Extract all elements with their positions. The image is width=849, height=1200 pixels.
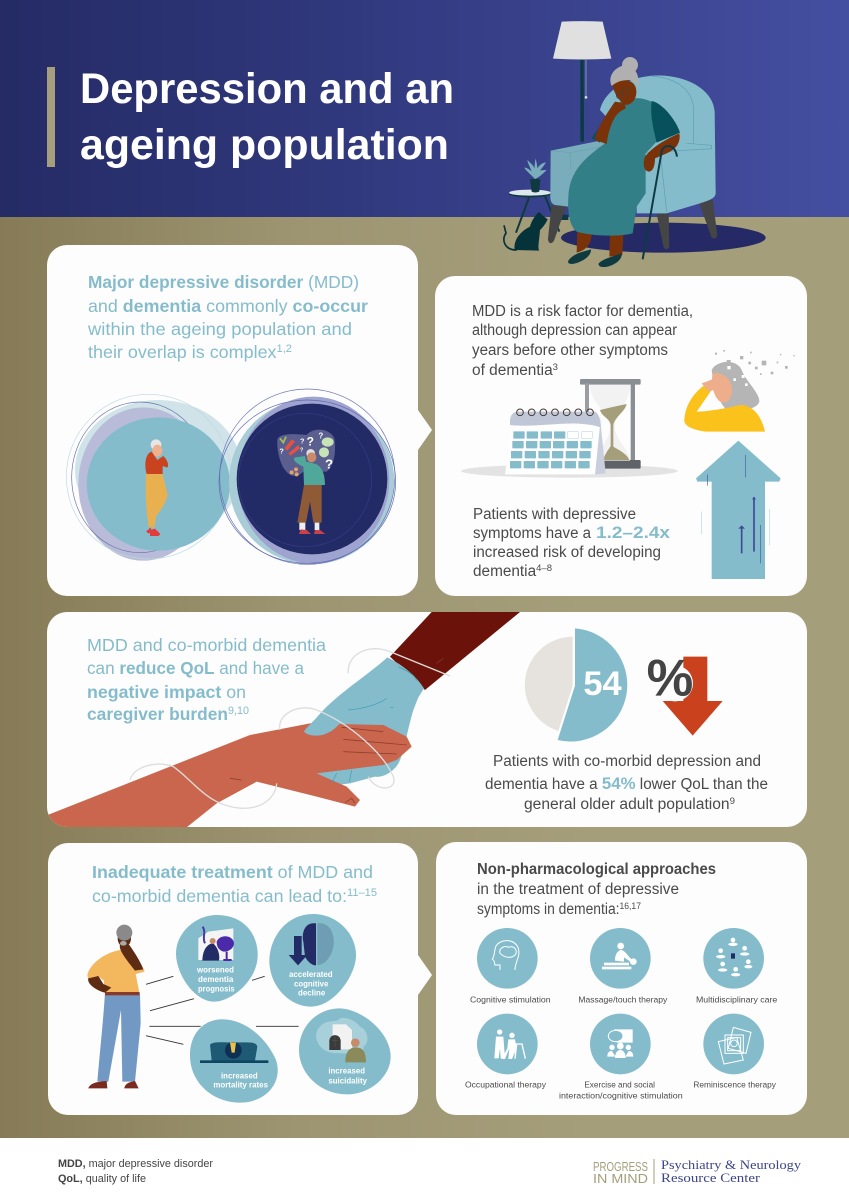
- panel: MDD risk factor: [435, 276, 807, 596]
- panel: inadequate treatment: [48, 843, 432, 1115]
- icon: occupational therapy: Occupational therapy: [465, 1080, 547, 1090]
- icon: calendar: [505, 409, 606, 474]
- text: risk factor: years before other symptoms: [472, 342, 668, 359]
- abbreviations: MDD, major depressive disorder: [58, 1158, 213, 1170]
- stat: 1.2-2.4x risk: dementia: [473, 563, 536, 580]
- icon: massage: Massage/touch therapy: [578, 995, 668, 1005]
- figure: confused man with thought cloud: ?: [300, 448, 303, 454]
- title: ageing population: [80, 122, 449, 169]
- text: risk factor: 3: [553, 362, 558, 373]
- blob: accelerated decline: cognitive: [294, 978, 329, 988]
- figure: thinking man: [87, 925, 145, 1088]
- outcomes diagram: [87, 914, 391, 1103]
- icon: reminiscence therapy: [693, 1014, 777, 1090]
- blob: mortality: [190, 1019, 278, 1103]
- heading: QoL: MDD and co-morbid dementia: [87, 635, 326, 655]
- blob: worsened prognosis: dementia: [198, 974, 234, 984]
- heading: QoL: 9,10: [228, 705, 249, 717]
- figure: confused man with thought cloud: ?: [307, 434, 314, 448]
- heading: approaches: Non-pharmacological approaches: [477, 861, 716, 878]
- venn circles with two figures: [66, 389, 396, 564]
- heading: approaches: 16,17: [620, 901, 641, 912]
- figure: confused man with thought cloud: ?: [318, 431, 323, 440]
- title accent bar: [47, 67, 55, 167]
- heading: inadequate treatment: 11–15: [347, 887, 377, 899]
- footer background: [0, 1138, 849, 1200]
- icon: multidisciplinary care: Multidisciplinary care: [696, 995, 778, 1005]
- blob: mortality: increased: [221, 1070, 258, 1080]
- heading: overlap: their overlap is complex: [88, 342, 273, 362]
- figure: confused man with thought cloud: [277, 430, 335, 534]
- text: risk factor: although depression can appear: [472, 322, 677, 339]
- blob: worsened prognosis: prognosis: [198, 983, 235, 993]
- heading: approaches: symptoms in dementia:: [477, 901, 635, 918]
- logo: Progress in Mind: IN MIND: [593, 1172, 648, 1186]
- illustration: holding hands: [43, 612, 520, 830]
- stat: 1.2-2.4x risk: 4–8: [536, 563, 552, 574]
- figure: confused man with thought cloud: ?: [325, 456, 333, 471]
- logo: Progress in Mind: Psychiatry & Neurology: [661, 1157, 802, 1172]
- title: Depression and an: [80, 66, 454, 113]
- tan background: [0, 217, 849, 1138]
- heading: inadequate treatment: [92, 862, 377, 906]
- icon: multidisciplinary care: [696, 928, 778, 1005]
- chart: 54% pie and down arrow: %: [647, 648, 693, 706]
- heading: QoL: can reduce QoL and have a: [87, 658, 304, 678]
- icon: exercise and social: interaction/cognitive stimulation: [559, 1091, 683, 1101]
- icon: exercise and social: [559, 1014, 683, 1101]
- title: [80, 66, 454, 169]
- stat: 1.2-2.4x risk: [473, 506, 671, 580]
- heading: inadequate treatment: co-morbid dementia can lead to:: [92, 886, 343, 906]
- heading: overlap: Major depressive disorder (MDD): [88, 272, 359, 292]
- blob: worsened prognosis: [176, 915, 258, 1002]
- blob: mortality: mortality rates: [213, 1080, 268, 1090]
- icon: occupational therapy: [465, 1014, 547, 1090]
- logo: Progress in Mind: Resource Center: [661, 1170, 761, 1185]
- text: risk factor: [472, 303, 693, 379]
- heading: QoL: [87, 635, 326, 724]
- heading: approaches: [477, 861, 716, 918]
- stat: 1.2-2.4x risk: 1.2–2.4x: [596, 523, 671, 542]
- blob: accelerated decline: [269, 914, 356, 1007]
- figure: anxious woman: [145, 439, 168, 536]
- heading: overlap: within the ageing population and: [87, 319, 352, 339]
- blob: suicidality: suicidality: [328, 1076, 367, 1086]
- stat: 1.2-2.4x risk: increased risk of developing: [473, 544, 661, 561]
- icon: reminiscence therapy: Reminiscence therapy: [693, 1080, 777, 1090]
- heading: QoL: caregiver burden: [87, 704, 228, 724]
- stat: 54% lower QoL: [485, 753, 768, 813]
- stat: 54% lower QoL: Patients with co-morbid depression and: [493, 753, 761, 770]
- heading: inadequate treatment: Inadequate treatment of MDD and: [92, 862, 373, 882]
- abbreviations: QoL, quality of life: [58, 1173, 146, 1185]
- icons: calendar, hourglass, head, arrow: [461, 350, 795, 579]
- icon: cognitive stimulation: Cognitive stimulation: [470, 995, 551, 1005]
- logo: Progress in Mind: PROGRESS: [593, 1160, 648, 1174]
- heading: overlap: and dementia commonly co-occur: [88, 296, 368, 316]
- blob: suicidality: increased: [328, 1066, 365, 1076]
- blob: suicidality: [299, 1008, 391, 1094]
- panel: non-pharmacological approaches: [436, 842, 807, 1115]
- header band: [0, 0, 849, 217]
- heading: overlap: [87, 272, 368, 362]
- chart: 54% pie and down arrow: 54: [583, 665, 622, 703]
- arrow: increased risk: [696, 441, 781, 579]
- abbreviations: [58, 1158, 213, 1185]
- heading: QoL: negative impact on: [87, 682, 246, 702]
- text: risk factor: MDD is a risk factor for dementia,: [472, 303, 693, 320]
- illustration: older woman in armchair: [504, 21, 766, 267]
- blob: accelerated decline: decline: [298, 988, 326, 998]
- blob: accelerated decline: accelerated: [289, 969, 333, 979]
- panel: quality of life and caregiver burden: [43, 612, 807, 830]
- icon: hourglass: [580, 379, 641, 469]
- heading: approaches: in the treatment of depressive: [477, 881, 679, 898]
- text: risk factor: of dementia: [472, 362, 552, 379]
- chart: 54% pie and down arrow: [525, 628, 723, 741]
- therapy icons: [465, 928, 778, 1101]
- icon: cognitive stimulation: [470, 928, 551, 1005]
- icon: exercise and social: Exercise and social: [584, 1080, 655, 1090]
- stat: 54% lower QoL: dementia have a 54% lower QoL than the: [485, 774, 768, 793]
- stat: 1.2-2.4x risk: Patients with depressive: [473, 506, 636, 523]
- icon: massage: [578, 928, 668, 1005]
- heading: overlap: 1,2: [277, 343, 292, 355]
- panel: MDD and dementia overlap: [47, 245, 432, 596]
- figure: confused man with thought cloud: ?: [279, 446, 284, 455]
- icon: head dissolving: [684, 350, 795, 432]
- figure: confused man with thought cloud: ?: [300, 436, 305, 445]
- logo: Progress in Mind: [593, 1157, 802, 1186]
- stat: 54% lower QoL: 9: [730, 796, 735, 807]
- stat: 1.2-2.4x risk: symptoms have a: [473, 525, 591, 542]
- blob: worsened prognosis: worsened: [196, 965, 234, 975]
- stat: 54% lower QoL: general older adult population: [524, 796, 727, 813]
